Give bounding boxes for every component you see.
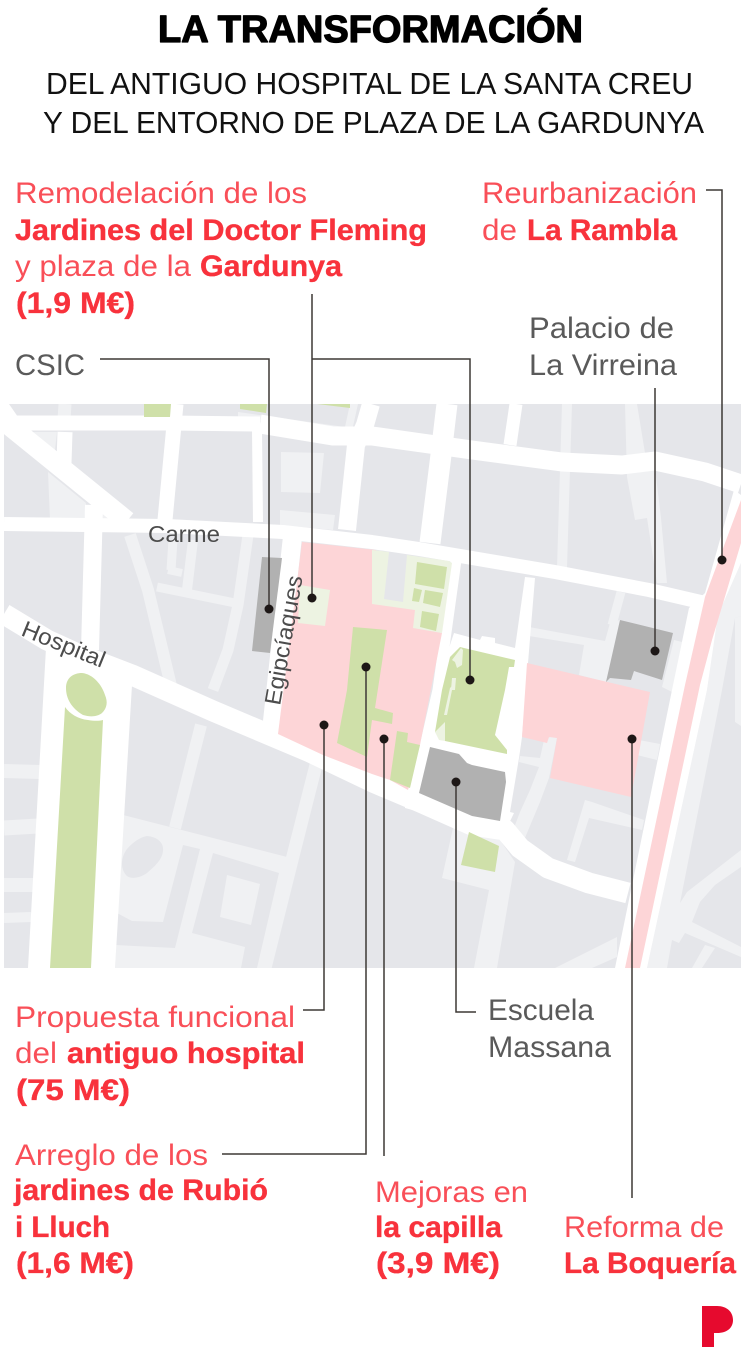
leader: plaza de la Gardunya bbox=[312, 359, 474, 684]
park paths bbox=[435, 648, 463, 741]
La Rambla pink strip bbox=[625, 500, 741, 968]
leader: CSIC bbox=[100, 359, 274, 614]
white main streets bbox=[0, 404, 741, 968]
label: La Boquería: La Boquería bbox=[564, 1247, 736, 1280]
label: La Rambla: de bbox=[482, 214, 517, 247]
leader: La Rambla bbox=[706, 190, 726, 564]
pale secondary streets bbox=[4, 404, 741, 968]
street label: Egipcíaques: Egipcíaques bbox=[259, 573, 308, 707]
street label: Carme: Carme bbox=[148, 521, 220, 547]
label: la capilla: Mejoras en bbox=[375, 1176, 528, 1209]
label: Escuela Massana bbox=[488, 994, 611, 1064]
label: Jardines del Doctor Fleming y Gardunya: Gardunya bbox=[200, 250, 342, 283]
label: La Rambla: Reurbanización bbox=[482, 177, 697, 210]
icon: publisher P logo bbox=[702, 1306, 733, 1347]
subtitle: Y DEL ENTORNO DE PLAZA DE LA GARDUNYA bbox=[43, 105, 704, 140]
leader: la capilla bbox=[380, 734, 388, 1156]
label: jardines de Rubió i Lluch: jardines de Rubió bbox=[13, 1174, 268, 1207]
label: La Rambla bbox=[482, 177, 697, 247]
label: Jardines del Doctor Fleming y Gardunya: y plaza de la bbox=[15, 250, 191, 283]
pale green hospital gardens bbox=[298, 550, 452, 633]
label: jardines de Rubió i Lluch: (1,6 M€) bbox=[16, 1247, 134, 1280]
label: antiguo hospital: antiguo hospital bbox=[67, 1037, 305, 1070]
grey buildings bbox=[252, 557, 673, 821]
label: la capilla bbox=[375, 1176, 528, 1280]
label: Escuela Massana: Escuela bbox=[488, 994, 594, 1027]
leader: Palacio de La Virreina bbox=[650, 388, 660, 656]
label: jardines de Rubió i Lluch: i Lluch bbox=[15, 1211, 110, 1244]
leader: La Boquería bbox=[628, 734, 636, 1198]
label: La Rambla: La Rambla bbox=[527, 214, 677, 247]
label: Jardines del Doctor Fleming y Gardunya: Remodelación de los bbox=[15, 177, 307, 210]
street label: Hospital: Hospital bbox=[18, 616, 109, 673]
leader: jardines de Rubió i Lluch bbox=[222, 662, 370, 1154]
hospital pink area bbox=[278, 542, 442, 790]
subtitle: DEL ANTIGUO HOSPITAL DE LA SANTA CREU bbox=[46, 66, 693, 101]
label: Jardines del Doctor Fleming y Gardunya: Jardines del Doctor Fleming bbox=[15, 214, 427, 247]
label: antiguo hospital bbox=[15, 1001, 305, 1107]
label: Jardines del Doctor Fleming y Gardunya bbox=[15, 177, 427, 320]
leader: Jardines del Doctor Fleming bbox=[308, 294, 316, 602]
label: antiguo hospital: del bbox=[15, 1037, 57, 1070]
label: La Boquería: Reforma de bbox=[564, 1211, 724, 1244]
leader: antiguo hospital bbox=[303, 720, 328, 1010]
label: CSIC: CSIC bbox=[15, 349, 85, 382]
Boquería pink area bbox=[522, 663, 650, 797]
label: Palacio de La Virreina bbox=[529, 312, 677, 382]
label: Escuela Massana: Massana bbox=[488, 1031, 611, 1064]
leader: Escuela Massana bbox=[452, 778, 476, 1012]
label: antiguo hospital: Propuesta funcional bbox=[15, 1001, 295, 1034]
subtitle bbox=[43, 66, 704, 140]
label: antiguo hospital: (75 M€) bbox=[16, 1074, 130, 1107]
label: Jardines del Doctor Fleming y Gardunya: (1,9 M€) bbox=[16, 287, 135, 320]
label: Palacio de La Virreina: Palacio de bbox=[529, 312, 674, 345]
label: La Boquería bbox=[564, 1211, 736, 1280]
label: Palacio de La Virreina: La Virreina bbox=[529, 349, 677, 382]
title: LA TRANSFORMACIÓN bbox=[158, 7, 583, 51]
label: jardines de Rubió i Lluch bbox=[13, 1139, 268, 1280]
label: la capilla: (3,9 M€) bbox=[376, 1247, 500, 1280]
label: jardines de Rubió i Lluch: Arreglo de los bbox=[15, 1139, 208, 1172]
label: la capilla: la capilla bbox=[375, 1211, 502, 1244]
green areas bbox=[50, 404, 515, 968]
map bbox=[0, 404, 741, 968]
